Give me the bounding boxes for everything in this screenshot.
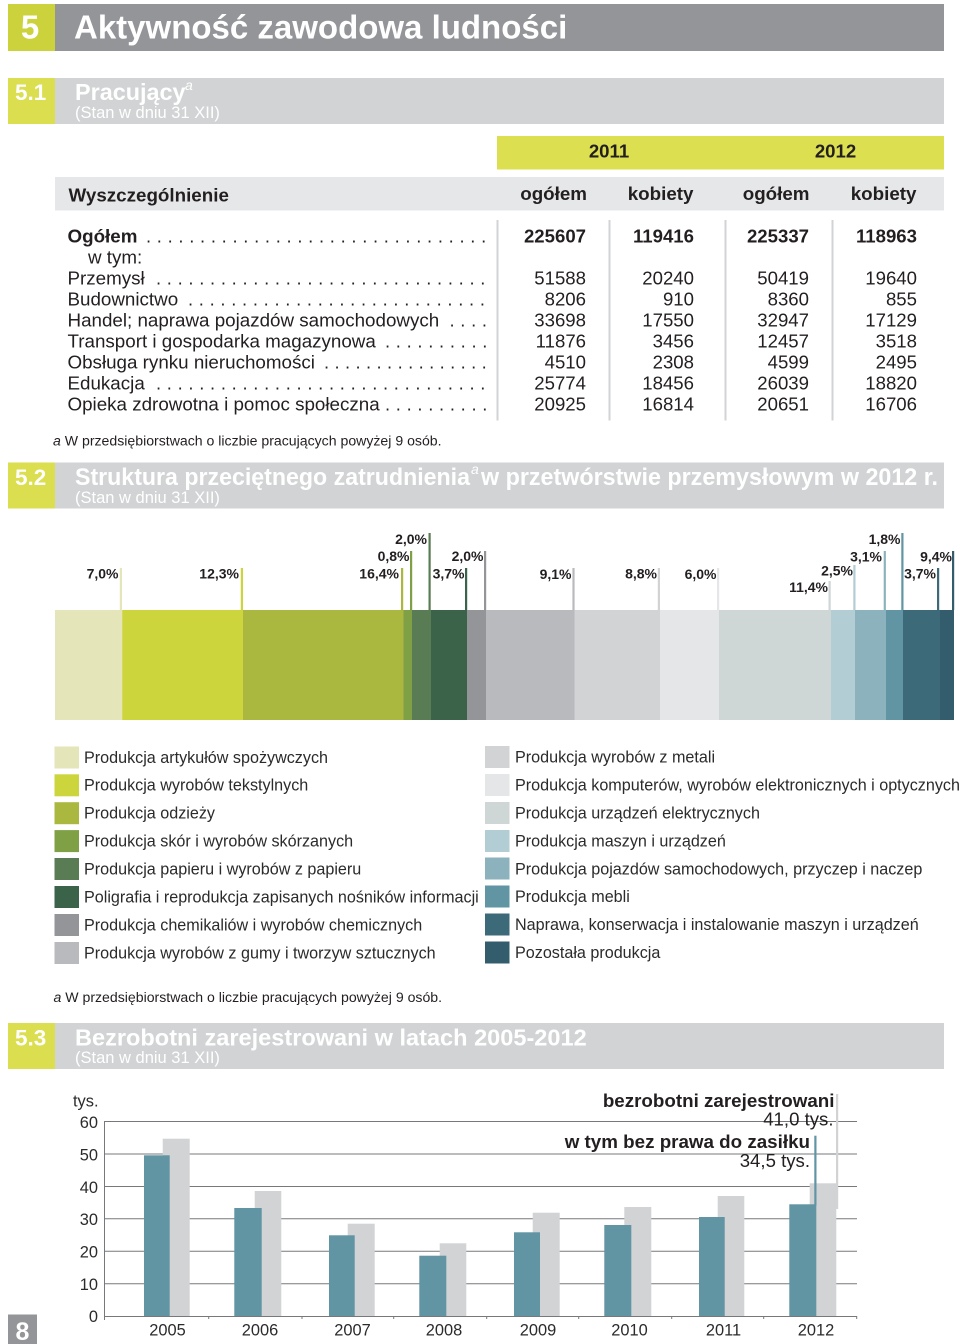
table: employed persons (55, 136, 944, 420)
table row labels (68, 226, 439, 414)
table values 2011 women: 3456 (653, 330, 694, 352)
table values 2012 total: 32947 (757, 310, 809, 330)
chapter heading: Aktywność zawodowa ludności (74, 8, 567, 46)
table values 2011 women: 18456 (642, 372, 694, 394)
table values 2011 total: 225607 (524, 226, 586, 246)
bars: without benefit rights (144, 1136, 816, 1316)
page number (8, 1314, 37, 1344)
section heading 5.3: Bezrobotni zarejestrowani w latach 2005-2012 (75, 1024, 587, 1050)
section heading 5.2: 5.2 (15, 465, 46, 490)
table values 2011 total: 20925 (534, 394, 586, 414)
callout: without benefit rights: 34,5 tys. (740, 1150, 810, 1171)
y axis labels: 10 (80, 1276, 98, 1294)
footnote 5.2: a W przedsiębiorstwach o liczbie pracujących powyżej 9 osób. (54, 989, 442, 1005)
stacked bar percentage labels: 9,4% (920, 548, 953, 564)
stacked bar percentage labels: 2,0% (395, 531, 428, 547)
table values 2011 total: 11876 (536, 330, 586, 352)
section heading 5.1: 5.1 (15, 80, 46, 105)
table row labels: Opieka zdrowotna i pomoc społeczna (68, 394, 380, 414)
table year header (497, 136, 944, 170)
bars: total registered unemployed (163, 1094, 838, 1316)
table year header: 2012 (815, 140, 856, 162)
table year header: 2011 (589, 140, 629, 162)
section heading 5.1: Pracujący (75, 79, 186, 105)
legend: right column: Pozostała produkcja (515, 944, 660, 962)
table values 2012 women: 17129 (865, 310, 917, 330)
x axis year labels: 2012 (798, 1322, 834, 1340)
callout: without benefit rights (564, 1131, 810, 1171)
stacked bar percentage labels: 3,7% (904, 566, 937, 582)
table values 2012 total: 26039 (757, 372, 809, 394)
y axis labels: 20 (80, 1244, 98, 1262)
y axis labels: 50 (80, 1146, 98, 1164)
stacked bar chart: employment structure (55, 531, 954, 720)
table column header: kobiety (851, 183, 917, 204)
table values 2011 women: 17550 (642, 310, 694, 330)
table row labels: Edukacja (68, 372, 145, 394)
table row labels: Obsługa rynku nieruchomości (68, 352, 315, 372)
legend: left column: Produkcja odzieży (84, 804, 216, 822)
table row labels: Ogółem (68, 226, 137, 246)
table values 2012 total: 50419 (757, 268, 809, 288)
y axis labels: 30 (80, 1211, 98, 1229)
stacked bar segments (55, 610, 954, 720)
table values 2012 total: 20651 (757, 394, 809, 414)
table column header: ogółem (743, 183, 810, 204)
legend: left column: Produkcja papieru i wyrobów z papieru (84, 860, 361, 878)
table values 2012 total (747, 226, 809, 414)
y axis labels: tys. (73, 1092, 98, 1110)
table column header: Wyszczególnienie (68, 184, 229, 206)
stacked bar percentage labels: 3,1% (850, 548, 883, 564)
legend: left column: Poligrafia i reprodukcja zapisanych nośników informacji (84, 889, 479, 907)
section heading 5.3: 5.3 (15, 1026, 46, 1050)
table dot leaders (146, 226, 493, 414)
section heading 5.3 (8, 1023, 944, 1069)
callout: without benefit rights: w tym bez prawa do zasiłku (564, 1131, 810, 1152)
chapter heading: 5 (21, 8, 39, 46)
table values 2012 total: 4599 (768, 352, 809, 372)
x axis year labels: 2007 (334, 1322, 371, 1340)
section heading 5.2 (8, 461, 944, 508)
legend: right column: Naprawa, konserwacja i instalowanie maszyn i urządzeń (515, 916, 919, 934)
x axis year labels: 2006 (242, 1322, 278, 1340)
table row labels: Handel; naprawa pojazdów samochodowych (68, 310, 439, 330)
table values 2011 women: 20240 (642, 268, 694, 288)
table dot leaders: .......... (385, 394, 493, 414)
footnote 5.1: a W przedsiębiorstwach o liczbie pracujących powyżej 9 osób. (53, 432, 442, 448)
table row labels: Transport i gospodarka magazynowa (68, 330, 376, 352)
table dot leaders: ................................ (146, 226, 492, 246)
legend: left column: Produkcja skór i wyrobów skórzanych (84, 833, 353, 851)
table values 2012 women: 118963 (856, 226, 917, 246)
stacked bar percentage labels: 9,1% (540, 566, 572, 582)
section heading 5.3: (Stan w dniu 31 XII) (75, 1049, 220, 1067)
section heading 5.1 (8, 77, 944, 124)
table values 2012 total: 12457 (757, 330, 809, 352)
table values 2012 total: 8360 (768, 288, 809, 310)
table values 2011 total: 8206 (545, 288, 586, 310)
table values 2012 women: 19640 (865, 268, 917, 288)
legend: right column: Produkcja pojazdów samochodowych, przyczep i naczep (515, 860, 922, 878)
chapter heading (8, 4, 944, 51)
stacked bar percentage labels: 11,4% (789, 579, 829, 595)
table values 2011 women: 910 (663, 288, 694, 310)
stacked bar percentage labels: 3,7% (433, 566, 465, 582)
legend: right column: Produkcja komputerów, wyrobów elektronicznych i optycznych (515, 776, 960, 794)
section heading 5.2: a (471, 461, 479, 477)
x axis year labels (149, 1322, 834, 1340)
y axis labels: 60 (80, 1114, 98, 1132)
table values 2011 total: 33698 (534, 310, 586, 330)
table values 2011 women: 2308 (653, 352, 694, 372)
legend: left column: Produkcja wyrobów tekstylnych (84, 777, 308, 795)
table dot leaders: ............................... (156, 372, 491, 394)
callout: registered unemployed (603, 1090, 834, 1130)
table values 2012 women: 18820 (865, 372, 917, 394)
stacked bar percentage labels (87, 531, 953, 595)
table values 2012 women: 16706 (865, 394, 917, 414)
legend: right column: Produkcja mebli (515, 888, 630, 906)
x axis year labels: 2005 (149, 1322, 186, 1340)
stacked bar percentage labels: 16,4% (359, 566, 400, 582)
bar chart: registered unemployed 2005-2012 (73, 1090, 857, 1340)
stacked bar percentage labels: 2,5% (821, 562, 854, 578)
x axis year labels: 2011 (706, 1322, 741, 1340)
stacked bar percentage labels: 1,8% (869, 531, 901, 547)
stacked bar percentage labels: 12,3% (199, 566, 240, 582)
table values 2011 total: 4510 (545, 352, 586, 372)
table dot leaders: .... (450, 310, 493, 330)
stacked bar leader ticks (120, 533, 954, 610)
stacked bar percentage labels: 7,0% (87, 566, 119, 582)
callout: registered unemployed: 41,0 tys. (763, 1108, 834, 1130)
x axis year labels: 2009 (520, 1322, 556, 1340)
table column header (55, 177, 944, 210)
legend: left column (54, 746, 479, 964)
x axis year labels: 2010 (611, 1322, 648, 1340)
section heading 5.2: w przetwórstwie przemysłowym w 2012 r. (480, 465, 938, 491)
table values 2012 women: 3518 (876, 330, 917, 352)
callout: registered unemployed: bezrobotni zarejestrowani (603, 1090, 834, 1111)
table row labels: w tym: (87, 246, 142, 268)
table row labels: Budownictwo (68, 288, 178, 310)
table values 2012 women: 2495 (876, 352, 917, 372)
stacked bar percentage labels: 2,0% (452, 548, 484, 564)
legend: right column (485, 746, 960, 964)
table column header: ogółem (520, 183, 587, 204)
y axis labels (73, 1092, 98, 1326)
x axis year labels: 2008 (426, 1322, 462, 1340)
stacked bar percentage labels: 8,8% (625, 566, 658, 582)
table column header: kobiety (628, 183, 694, 204)
stacked bar percentage labels: 6,0% (685, 566, 717, 582)
table values 2011 total (524, 226, 586, 414)
table dot leaders: ............................ (188, 288, 491, 310)
table values 2011 women: 16814 (642, 394, 694, 414)
section heading 5.2: (Stan w dniu 31 XII) (75, 489, 220, 507)
table values 2011 total: 25774 (534, 372, 586, 394)
legend: left column: Produkcja artykułów spożywczych (84, 749, 328, 767)
table dot leaders: ................ (324, 352, 492, 372)
y axis labels: 40 (80, 1179, 98, 1197)
table values 2012 women (856, 226, 917, 414)
section heading 5.1: a (185, 77, 193, 93)
legend: left column: Produkcja wyrobów z gumy i tworzyw sztucznych (84, 944, 436, 962)
legend: right column: Produkcja wyrobów z metali (515, 748, 715, 766)
table dot leaders: ............................... (156, 268, 491, 288)
table values 2011 women (633, 226, 694, 414)
table values 2012 total: 225337 (747, 226, 809, 246)
y axis labels: 0 (89, 1308, 98, 1326)
section heading 5.1: (Stan w dniu 31 XII) (75, 104, 220, 122)
table dot leaders: .......... (385, 330, 493, 352)
legend: left column: Produkcja chemikaliów i wyrobów chemicznych (84, 917, 422, 935)
stacked bar percentage labels: 0,8% (378, 548, 410, 564)
section heading 5.2: Struktura przeciętnego zatrudnienia (75, 465, 471, 491)
legend: right column: Produkcja urządzeń elektrycznych (515, 804, 760, 822)
legend: right column: Produkcja maszyn i urządzeń (515, 832, 726, 850)
table row labels: Przemysł (68, 268, 146, 288)
table values 2011 total: 51588 (534, 268, 586, 288)
table values 2011 women: 119416 (633, 226, 694, 246)
table values 2012 women: 855 (886, 288, 917, 310)
